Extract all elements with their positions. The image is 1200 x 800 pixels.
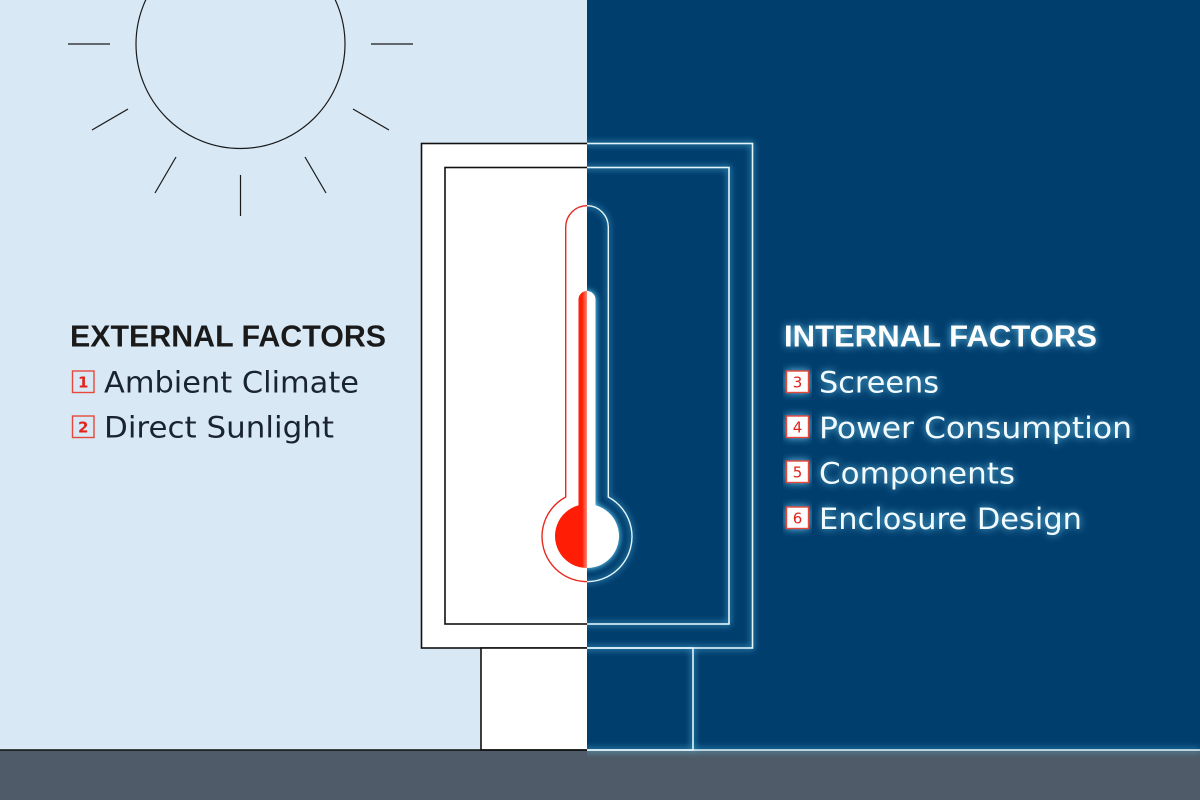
item 2: Direct Sunlight (104, 410, 334, 444)
enclosure: external half (0, 142, 587, 751)
panel: internal background (587, 0, 1200, 750)
item 4: 4 (793, 418, 802, 436)
item 5: 5 (793, 464, 802, 482)
ground (0, 750, 1200, 800)
thermometer: external half (541, 205, 587, 582)
item 5: Components (819, 456, 1015, 490)
item 1: 1 (78, 374, 88, 392)
item 3: Screens (819, 366, 939, 400)
icon: sun (68, 0, 413, 216)
item 1: Ambient Climate (104, 366, 359, 400)
text block: internal factors (784, 318, 1132, 536)
heading: external factors: EXTERNAL FACTORS (70, 318, 386, 354)
thermometer: internal half (587, 200, 637, 586)
item 3: 3 (793, 374, 802, 392)
enclosure: internal half glowing outline (587, 138, 1200, 756)
heading: internal factors: INTERNAL FACTORS (784, 318, 1097, 354)
panel: external background (0, 0, 587, 750)
text block: external factors (70, 318, 386, 444)
item 2: 2 (78, 418, 88, 436)
item 6: 6 (793, 510, 802, 528)
item 6: Enclosure Design (819, 502, 1082, 536)
item 4: Power Consumption (819, 411, 1132, 445)
